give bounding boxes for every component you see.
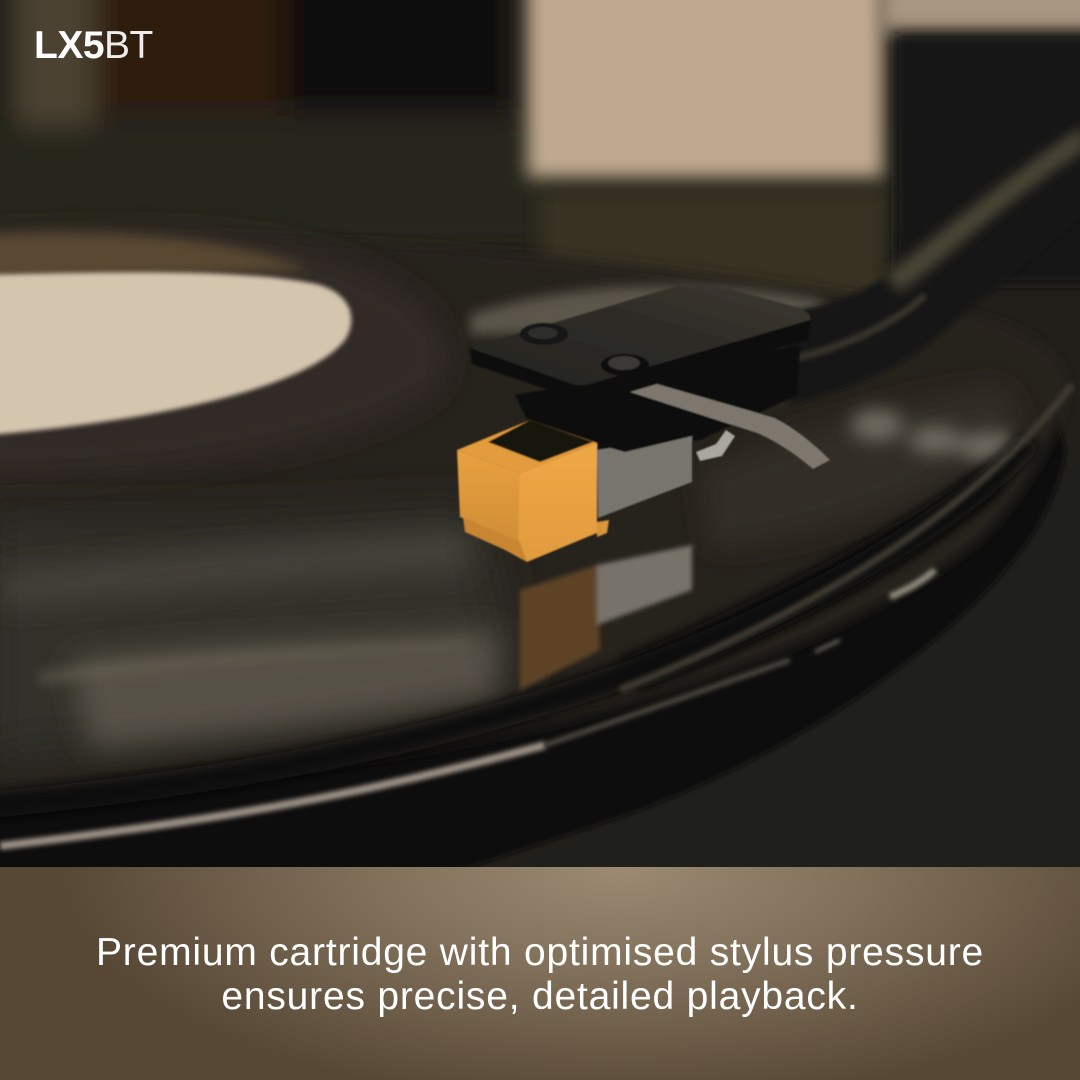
cartridge and headshell [457, 285, 830, 562]
reflection of cartridge [520, 545, 692, 690]
record label [0, 272, 351, 436]
grooves shadow right [620, 465, 1000, 690]
vinyl record surface [0, 230, 1068, 800]
orange stylus: left face [457, 450, 520, 542]
stylus mount glint [696, 430, 735, 461]
headshell edge [470, 320, 810, 402]
orange stylus: right face [518, 443, 597, 562]
screw front [601, 354, 649, 376]
cartridge body: grey side [597, 435, 692, 518]
model logo: LX5BT [34, 24, 153, 67]
headshell top plate [470, 285, 810, 385]
caption text: ensures precise, detailed playback. [221, 975, 859, 1018]
orange stylus: top [457, 420, 597, 473]
finger lift [630, 384, 830, 469]
caption text: Premium cartridge with optimised stylus pressure [96, 931, 984, 974]
tonearm [790, 112, 1080, 405]
caption text [96, 931, 984, 1018]
brown caption band [0, 867, 1080, 1080]
black block [520, 392, 700, 452]
screw rear [520, 323, 568, 345]
platter side [0, 360, 1066, 875]
platter rim highlights [0, 385, 1072, 846]
reflected light spots on record [851, 409, 1022, 462]
